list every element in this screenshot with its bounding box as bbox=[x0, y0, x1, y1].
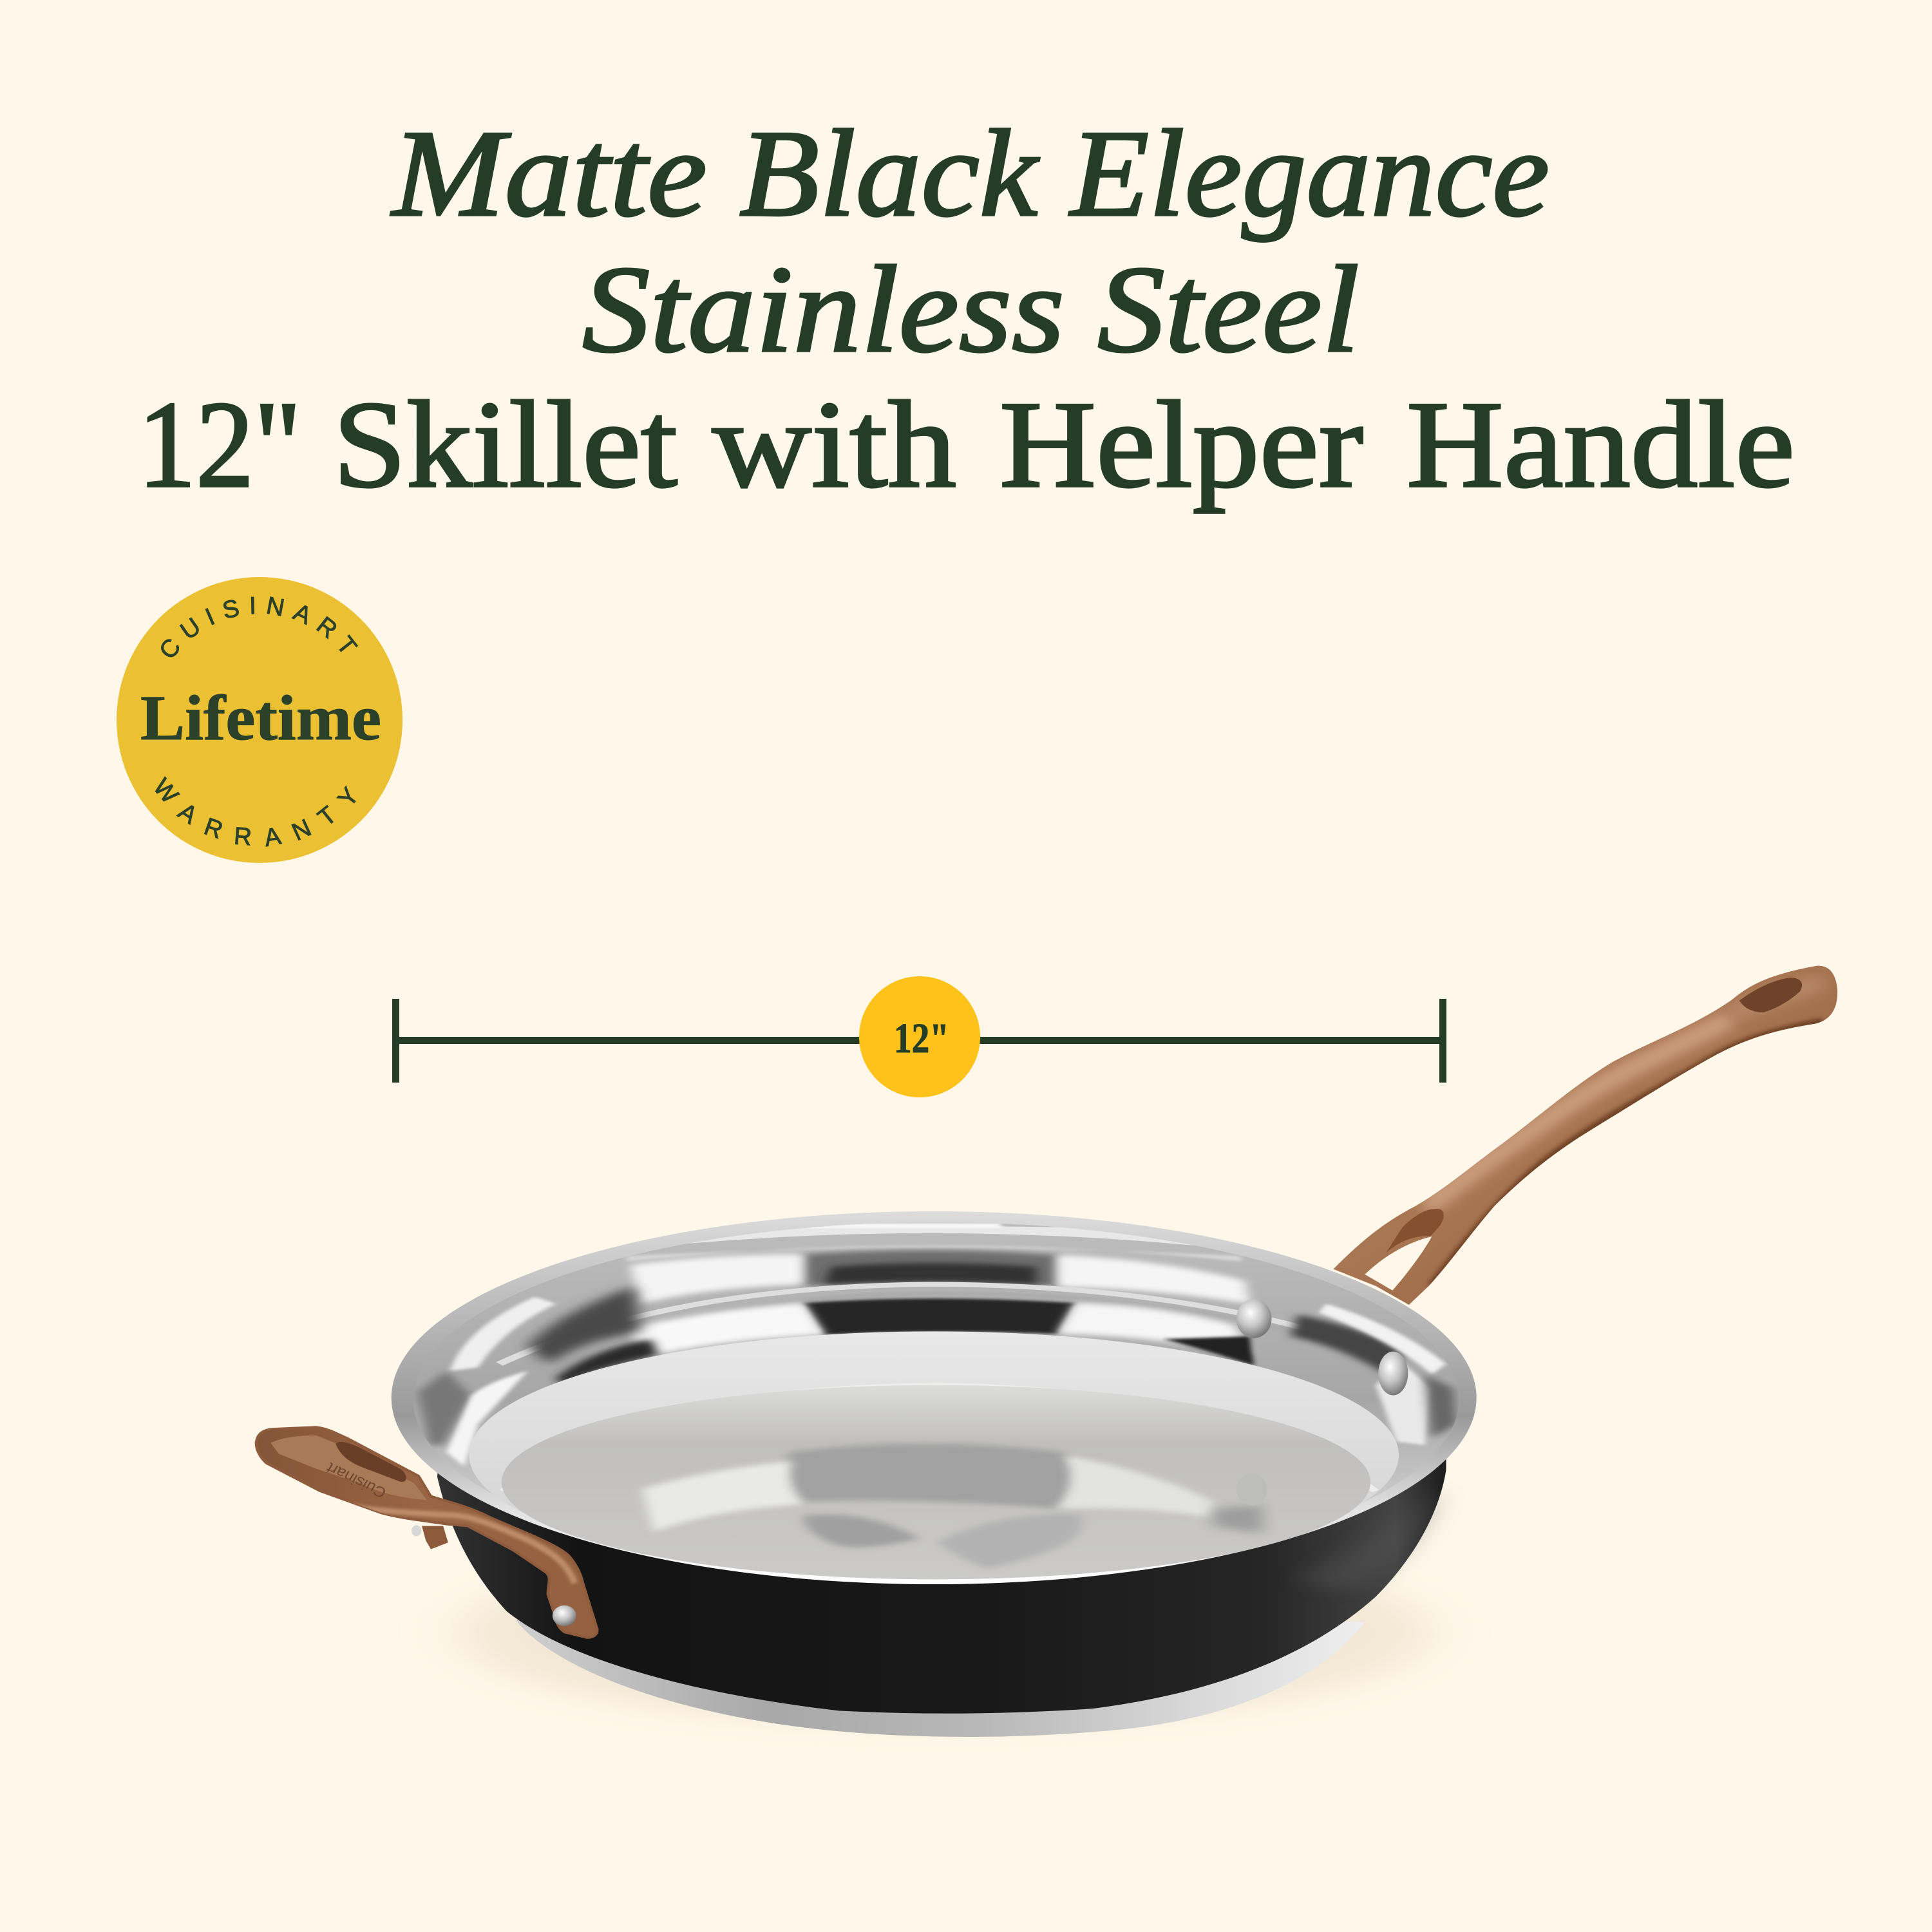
badge text: Cuisinart: CUISINART bbox=[161, 596, 358, 657]
title line 3: 12" bbox=[138, 375, 301, 513]
size label: 12" bbox=[894, 1015, 949, 1062]
helper handle bbox=[256, 1427, 597, 1638]
black enamel outer body bbox=[437, 1445, 1446, 1714]
badge circle bbox=[117, 577, 402, 863]
title line 2: Stainless bbox=[582, 240, 1065, 378]
handle grip and strap bbox=[256, 1427, 597, 1638]
size dimension line bbox=[392, 976, 1446, 1097]
title line 3: Skillet bbox=[333, 375, 677, 513]
title line 3: Handle bbox=[1406, 375, 1795, 513]
floor rivet bbox=[1236, 1473, 1267, 1505]
dimension bar bbox=[392, 999, 1446, 1083]
soft ground shadow bbox=[457, 1540, 1432, 1724]
lifetime warranty badge bbox=[117, 577, 402, 863]
handle opening bbox=[336, 1442, 406, 1482]
title line 1: Elegance bbox=[1068, 104, 1549, 242]
handle back strap bbox=[422, 1526, 448, 1549]
steel rim bbox=[392, 1211, 1477, 1584]
title bbox=[138, 104, 1795, 513]
wall rivet two bbox=[1378, 1352, 1408, 1396]
title line 1: Black bbox=[739, 104, 1040, 242]
wall reflections bbox=[418, 1223, 1457, 1466]
long copper handle bbox=[1333, 966, 1837, 1305]
skillet pan body bbox=[392, 1211, 1477, 1737]
inner floor bbox=[502, 1385, 1370, 1579]
steel base ring bbox=[516, 1620, 1365, 1737]
title line 3: Helper bbox=[999, 375, 1363, 513]
handle rivet bbox=[553, 1605, 576, 1626]
title line 3: with bbox=[712, 375, 956, 513]
skillet photo illustration bbox=[256, 966, 1837, 1737]
inner wall bbox=[413, 1222, 1459, 1578]
rear rivet bbox=[412, 1525, 421, 1537]
floor reflections bbox=[642, 1443, 1262, 1569]
size marker circle bbox=[859, 976, 980, 1097]
pan floor bbox=[469, 1331, 1399, 1578]
wall rivet one bbox=[1236, 1299, 1272, 1338]
badge text: Warranty: WARRANTY bbox=[155, 776, 356, 847]
title line 1: Matte bbox=[390, 104, 707, 242]
title line 2: Steel bbox=[1097, 240, 1359, 378]
badge text: Lifetime: Lifetime bbox=[140, 682, 381, 753]
handle engraving: Cuisinart bbox=[323, 1459, 390, 1501]
inner floor ring highlight bbox=[503, 1385, 1376, 1491]
